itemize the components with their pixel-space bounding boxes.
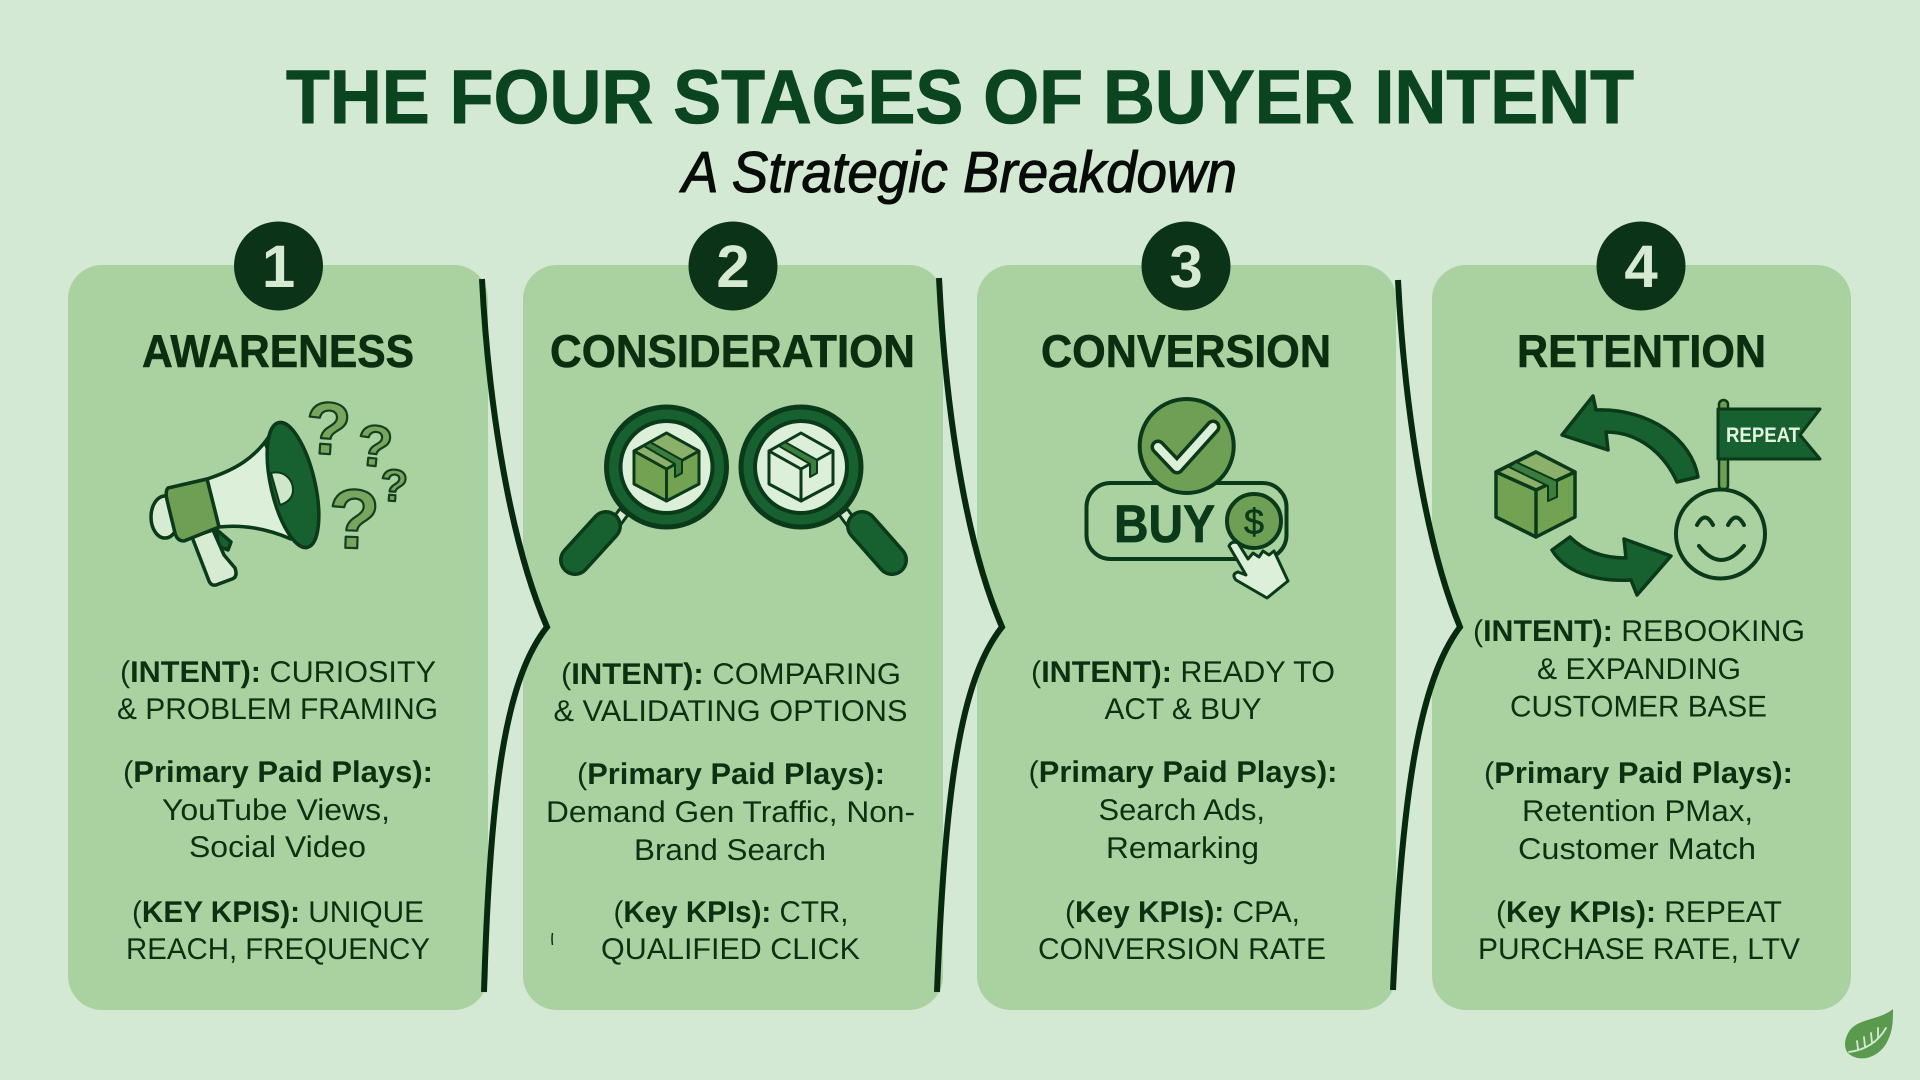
- text: key kpis: (Key KPIs): CTR,: [614, 896, 848, 929]
- panel: awareness: [68, 222, 488, 1010]
- text: primary paid plays: [546, 758, 915, 867]
- icon: megaphone with question marks: ?: [303, 386, 354, 471]
- icon: megaphone with question marks: ?: [378, 459, 409, 512]
- number badge 3: [1142, 222, 1230, 310]
- text: primary paid plays: Retention PMax,: [1522, 795, 1753, 828]
- text: intent: [117, 656, 438, 726]
- text: intent: & VALIDATING OPTIONS: [554, 695, 908, 728]
- icon: buy button with check and coin: $: [1244, 501, 1264, 542]
- icon: megaphone with question marks: [151, 386, 409, 585]
- text: primary paid plays: [1484, 757, 1793, 866]
- text: primary paid plays: [1028, 756, 1338, 865]
- text: primary paid plays: [123, 756, 433, 864]
- text: intent: (INTENT): REBOOKING: [1473, 615, 1805, 648]
- icon: two magnifying glasses with boxes: [575, 407, 892, 560]
- text: primary paid plays: (Primary Paid Plays):: [1028, 756, 1338, 789]
- subtitle: A Strategic Breakdown: [679, 140, 1237, 205]
- text: key kpis: PURCHASE RATE, LTV: [1478, 933, 1800, 966]
- text: key kpis: [1038, 896, 1326, 966]
- icon: megaphone with question marks: ?: [327, 471, 381, 567]
- number badge 4: [1596, 222, 1686, 310]
- text: key kpis: [1478, 896, 1800, 966]
- text: intent: (INTENT): READY TO: [1031, 656, 1335, 689]
- text: primary paid plays: Search Ads,: [1098, 794, 1265, 827]
- text: intent: CUSTOMER BASE: [1510, 690, 1767, 724]
- arrow: divider between conversion and retention: [1393, 280, 1460, 990]
- text: intent: (INTENT): CURIOSITY: [120, 656, 436, 689]
- text: primary paid plays: (Primary Paid Plays):: [577, 758, 885, 791]
- heading: consideration: CONSIDERATION: [550, 325, 915, 377]
- heading: conversion: CONVERSION: [1041, 325, 1331, 377]
- number badge 3: 3: [1169, 233, 1203, 300]
- text: intent: [1473, 615, 1805, 724]
- panel: consideration: [523, 222, 943, 1010]
- text: key kpis: (KEY KPIS): UNIQUE: [132, 896, 424, 929]
- text: key kpis: [126, 896, 430, 966]
- text: intent: ACT & BUY: [1104, 693, 1262, 726]
- icon: megaphone with question marks: ?: [354, 412, 396, 481]
- arrow: divider between awareness and consideration: [482, 279, 547, 992]
- text: key kpis: (Key KPIs): REPEAT: [1496, 896, 1782, 929]
- text: key kpis: (Key KPIs): CPA,: [1065, 896, 1300, 929]
- icon: leaf logo: [1845, 1009, 1893, 1058]
- text: intent: & PROBLEM FRAMING: [117, 693, 438, 726]
- heading: awareness: AWARENESS: [142, 325, 414, 377]
- number badge 1: [234, 222, 323, 310]
- text: primary paid plays: Demand Gen Traffic, Non-: [546, 796, 915, 829]
- icon: box, cycle arrows, smiley and repeat flag: REPEAT: [1726, 424, 1800, 447]
- text: primary paid plays: Brand Search: [634, 834, 826, 867]
- number badge 2: 2: [716, 233, 750, 300]
- panel: conversion: [977, 222, 1396, 1010]
- text: key kpis: CONVERSION RATE: [1038, 933, 1326, 966]
- text: intent: & EXPANDING: [1537, 653, 1741, 686]
- text: key kpis: QUALIFIED CLICK: [601, 933, 860, 966]
- number badge 2: [688, 222, 778, 310]
- text: intent: [1031, 656, 1335, 726]
- number badge 1: 1: [262, 233, 295, 300]
- text: intent: (INTENT): COMPARING: [561, 658, 901, 691]
- text: primary paid plays: Social Video: [189, 831, 366, 864]
- title: THE FOUR STAGES OF BUYER INTENT: [286, 55, 1634, 140]
- text: primary paid plays: Customer Match: [1518, 833, 1756, 866]
- text: key kpis: [601, 896, 860, 966]
- text: primary paid plays: (Primary Paid Plays):: [1484, 757, 1793, 790]
- text: key kpis: REACH, FREQUENCY: [126, 933, 430, 966]
- number badge 4: 4: [1624, 233, 1658, 300]
- text: primary paid plays: YouTube Views,: [162, 794, 390, 827]
- heading: retention: RETENTION: [1517, 325, 1766, 377]
- arrow: divider between consideration and conversion: [937, 278, 1002, 992]
- text: primary paid plays: (Primary Paid Plays):: [123, 756, 433, 789]
- icon: box, cycle arrows, smiley and repeat flag: [1496, 396, 1820, 595]
- icon: buy button with check and coin: [1086, 399, 1288, 598]
- panel: retention: [1432, 222, 1851, 1010]
- text: primary paid plays: Remarking: [1106, 832, 1259, 865]
- text: intent: [554, 658, 908, 728]
- icon: buy button with check and coin: BUY: [1114, 495, 1215, 554]
